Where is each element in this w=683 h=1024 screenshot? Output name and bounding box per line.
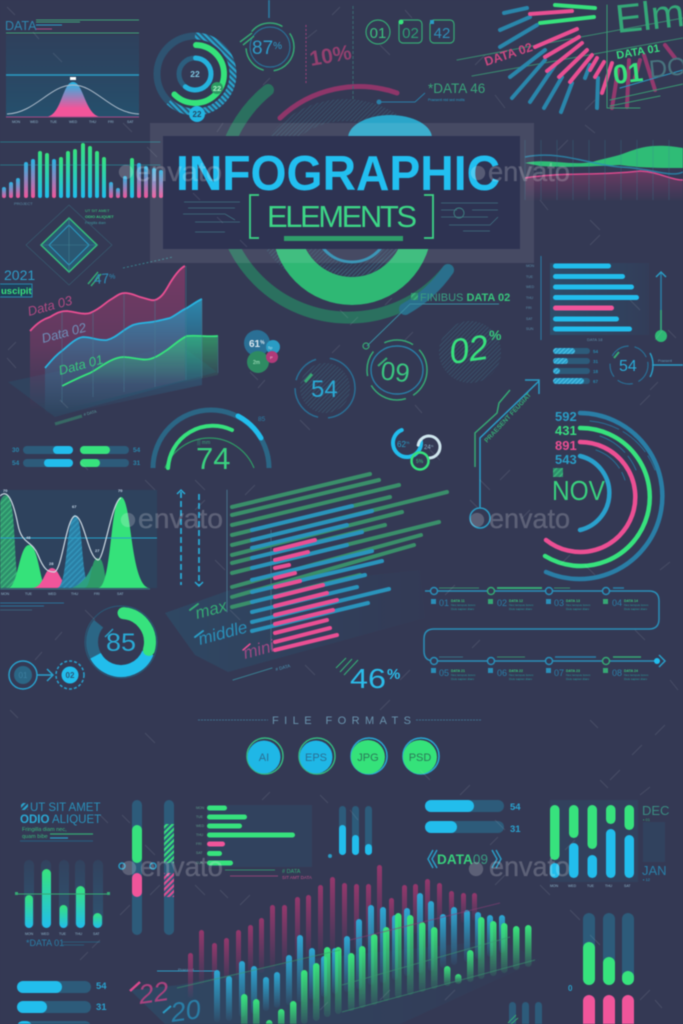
text: 2021 and uscipit [0, 267, 35, 297]
gauge 02%: 02 [447, 328, 491, 372]
chart: multi peak curves: 67 [72, 504, 77, 509]
chart: green cyan stacked columns: MON [550, 884, 559, 888]
heading: FILE FORMATS: FILE FORMATS [272, 715, 411, 727]
timeline labels: DATA 24 [624, 669, 638, 673]
timeline route [424, 588, 665, 681]
slider rows left: 30 [12, 447, 20, 454]
text block: UT SIT AMET [20, 802, 101, 841]
badge PSD: PSD [409, 752, 431, 764]
icon: diamond: UT SIT AMET [85, 208, 110, 213]
donut rings 22: 22 [213, 84, 221, 93]
chart: horizontal bars right: SAT [526, 317, 533, 321]
label max: max [193, 596, 230, 623]
chart: horizontal bars right: MON [526, 264, 535, 268]
gauge 87% [240, 0, 294, 71]
chart: 3D area layers: # DATA [83, 409, 98, 417]
flow 01 to 02: 01 [19, 671, 28, 680]
timeline labels: 03 [554, 598, 564, 608]
bubble cluster 61%: P [270, 355, 273, 360]
gauge 09: 09 [379, 355, 411, 388]
text: 2021 and uscipit: 2021 [4, 267, 35, 283]
gauge 54 [295, 358, 355, 418]
radial chart NOV: 543 [555, 452, 577, 467]
chart: multi peak curves: WED [48, 592, 57, 596]
hatched small bars: 54 [593, 349, 599, 354]
arrow with green ball [655, 272, 667, 342]
subtitle: ELEMENTS [267, 199, 417, 234]
chart: multi peak curves: 70 [118, 488, 123, 493]
chart: tall columns bottom right [568, 913, 634, 1024]
chart: green horizontal bars: SIT AMT DATA [282, 875, 312, 880]
donut rings 22 [157, 36, 233, 122]
axis labels: SAT [127, 120, 134, 124]
badges 01 02 42: 42 [434, 25, 450, 42]
chart: multi peak curves [0, 488, 157, 610]
label *DATA 46: Praesent nisl sed mollis [428, 98, 465, 102]
bubble cluster 61%: 5p [268, 345, 273, 350]
icon: diamond: Fringilla diam [85, 221, 106, 225]
badge AI: AI [259, 752, 269, 764]
timeline labels: Duis sapien diam [509, 677, 533, 681]
label DATA09 [428, 850, 501, 868]
chart: vertical columns: WED [41, 932, 50, 936]
chart: green cyan stacked columns: WED [568, 884, 577, 888]
timeline labels: Duis sapien diam [624, 607, 648, 611]
bubble cluster 61%: 61 [249, 339, 260, 350]
heading: DATA: DATA [5, 19, 37, 33]
chart: green horizontal bars: # DATA [282, 869, 301, 875]
chart: green horizontal bars: THU [196, 833, 204, 837]
bubble cluster 61%: % [260, 340, 265, 346]
label 46% [336, 658, 400, 694]
timeline labels: Nec tempus lorem [566, 673, 591, 677]
chart: green horizontal bars: TUE [196, 815, 204, 819]
chart: max middle mini skew bars [165, 474, 447, 680]
radial chart NOV: 592 [555, 409, 577, 424]
chart: frequency bars: PROJECT [14, 201, 33, 206]
label 22: 22 [136, 976, 171, 1010]
timeline labels: Duis sapien diam [624, 677, 648, 681]
chart: vertical columns: THU [75, 932, 83, 936]
chart: horizontal bars right: DATA 18 [587, 337, 603, 342]
label 46%: 46 [350, 663, 386, 694]
slider rows left: 54 [12, 460, 20, 467]
gauge 09 [367, 340, 427, 400]
chart: vertical columns: *DATA 01 [26, 938, 64, 948]
watermark envato 3: envato [138, 503, 223, 534]
gauge 54: 54 [311, 376, 338, 403]
badges 01 02 42 [353, 6, 454, 100]
gauge 74: ▒ mm [197, 439, 210, 446]
chart: vertical columns [15, 860, 110, 948]
bubble cluster 61% [244, 330, 280, 373]
chart: green horizontal bars: WED [196, 824, 205, 828]
timeline labels [431, 598, 649, 681]
gauge 87%: % [273, 41, 282, 52]
gauge 54 small: Praesent [658, 359, 672, 363]
timeline labels: DATA 14 [624, 599, 638, 603]
hatched small bars: 18 [593, 369, 599, 374]
timeline labels: DATA 11 [451, 599, 465, 603]
text block: UT SIT AMET: quam bibe [22, 834, 48, 840]
layer label: Data 03: Data 03 [26, 292, 75, 319]
axis labels: THU [89, 120, 97, 124]
timeline labels: 01 [439, 598, 449, 608]
radial spoke chart [457, 5, 683, 112]
progress bars bottom left: 54 [96, 981, 107, 992]
timeline labels: Duis sapien diam [451, 677, 475, 681]
chart: max middle mini skew bars: # DATA [275, 663, 291, 672]
layer label: Data 01: Data 01 [57, 352, 105, 378]
chart: cyan progress bars: 31 [510, 824, 521, 835]
timeline labels: 08 [612, 668, 622, 678]
badge AI [247, 738, 283, 774]
timeline labels: 07 [554, 668, 564, 678]
hatched small bars: 67 [593, 379, 599, 384]
chart: multi peak curves: THU [71, 592, 79, 596]
label DATA 02: DATA 02 [483, 40, 534, 69]
chart: green horizontal bars: SAT [196, 851, 203, 855]
axis labels: FRI [108, 120, 114, 124]
timeline labels: Duis sapien diam [509, 607, 533, 611]
chart: cyan progress bars: 54 [510, 802, 521, 813]
donut rings 22: 22 [190, 69, 200, 79]
chart: green horizontal bars: SUN [196, 861, 204, 865]
gauge 54 small [610, 346, 683, 384]
layer label: Data 02: Data 02 [40, 319, 89, 346]
gauge 74: 85 [258, 416, 266, 423]
chart: multi peak curves: 70 [3, 488, 8, 493]
radial chart NOV: 431 [555, 423, 577, 438]
big ring graphics behind title [123, 87, 448, 318]
chart: multi peak curves: SAT [117, 592, 124, 596]
chart: vertical columns: MON [25, 932, 34, 936]
chart: 3D column rows: Praesent [178, 967, 195, 972]
badge EPS: EPS [305, 752, 327, 764]
label JAN: JAN [642, 863, 667, 878]
gauge 02% [439, 321, 502, 383]
row: green columns [241, 913, 532, 1024]
dashed arrows up and down [177, 490, 203, 586]
ring cluster 62%: 24 [424, 445, 431, 451]
format badges [247, 738, 439, 774]
row: blue columns [214, 893, 505, 1022]
label 10% [306, 25, 354, 85]
donut rings 22: 22 [193, 110, 202, 119]
label 47%: % [109, 274, 116, 281]
label 46%: % [387, 666, 400, 683]
badge JPG: JPG [357, 752, 379, 764]
ring cluster 62%: 5% [416, 459, 424, 465]
badges 01 02 42: 01 [370, 25, 386, 42]
text block: Elm DATA 01 01 DOC: 01 [611, 57, 645, 90]
text block: UT SIT AMET: ODIO ALIQUET [20, 814, 101, 826]
timeline labels: Duis sapien diam [566, 607, 590, 611]
ring cluster 62% [391, 427, 442, 470]
label DATA09: DATA09 [437, 852, 488, 867]
hatched small bars: 31 [593, 359, 599, 364]
sliders vertical [119, 800, 174, 935]
watermark envato 4: envato [489, 503, 570, 534]
label middle: middle [196, 618, 249, 649]
chart: green horizontal bars [196, 805, 312, 880]
chart: green horizontal bars: FRI [196, 842, 202, 846]
watermark envato 6: envato [489, 851, 570, 882]
text block: Elm DATA 01 01 DOC [611, 0, 683, 90]
label 10%: 10% [308, 41, 354, 71]
badge PSD [403, 738, 439, 774]
watermark envato 5: envato [140, 851, 223, 882]
gauge 54 small: 54 [619, 358, 637, 375]
ring cluster 62%: % [406, 440, 410, 445]
text block: UT SIT AMET: UT SIT AMET [30, 802, 101, 814]
chart: frequency bars [0, 142, 163, 206]
watermark envato 1: envato [135, 156, 222, 187]
chart: green cyan stacked columns: TUE [587, 884, 595, 888]
timeline labels: DATA 22 [509, 669, 523, 673]
chart: horizontal bars right: THU [526, 296, 534, 300]
timeline labels: Nec tempus lorem [624, 603, 649, 607]
label mini: mini [241, 636, 277, 663]
chart: cyan progress bars [425, 800, 521, 835]
timeline labels: 06 [497, 668, 507, 678]
arrow PRAESENT FEUGIAT: PRAESENT FEUGIAT [483, 392, 533, 444]
timeline labels: 05 [439, 668, 449, 678]
title: INFOGRAPHIC [176, 147, 500, 201]
axis labels: WED [30, 120, 39, 124]
chart: multi peak curves: 48 [26, 535, 31, 540]
icon: diamond: ODIO ALIQUET [85, 214, 114, 219]
chart: mountain area [525, 140, 683, 202]
progress bars bottom left [17, 981, 107, 1024]
slider rows left: 54 [133, 447, 141, 454]
chart: green cyan stacked columns: ▪ 01 [643, 817, 651, 822]
timeline labels: DATA 12 [509, 599, 523, 603]
slider rows left [12, 446, 141, 467]
frame and title box [150, 123, 534, 263]
chart: green horizontal bars: MON [196, 806, 205, 810]
donut 85 [80, 601, 162, 683]
panel: bell curve chart [5, 19, 139, 124]
slider rows left: 31 [133, 460, 141, 467]
chart: small columns bottom [508, 1002, 542, 1024]
axis labels: WED [69, 120, 78, 124]
timeline labels: DATA 21 [451, 669, 465, 673]
gauge 74: 74 [196, 441, 230, 476]
chart: horizontal bars right: WED [526, 285, 535, 289]
axis labels: TUE [50, 120, 58, 124]
timeline labels: 02 [497, 598, 507, 608]
badge EPS [299, 738, 335, 774]
arrow PRAESENT FEUGIAT [470, 380, 539, 528]
chart: green cyan stacked columns: THU [605, 884, 613, 888]
chart: horizontal bars right [526, 256, 649, 342]
flow 01 to 02: 02 [66, 671, 75, 680]
callout FINIBUS DATA 02 [363, 292, 510, 349]
label DEC: DEC [642, 803, 669, 818]
watermark envato 2: envato [488, 156, 570, 187]
chart: 3D area layers [8, 266, 218, 424]
chart: green cyan stacked columns: SAT [624, 884, 631, 888]
chart: horizontal bars right: SUN [526, 327, 534, 331]
chart: multi peak curves: FRI [94, 592, 100, 596]
progress bars bottom left: 31 [96, 1002, 107, 1013]
timeline labels: Nec tempus lorem [566, 603, 591, 607]
timeline labels: Duis sapien diam [566, 677, 590, 681]
gauge 02%: % [489, 327, 502, 343]
callout FINIBUS DATA 02: FINIBUS DATA 02 [420, 292, 510, 304]
ring cluster 62%: % [431, 444, 434, 448]
timeline labels: Duis sapien diam [451, 607, 475, 611]
axis labels: MON [12, 120, 21, 124]
ring cluster 62%: 62 [397, 440, 406, 449]
timeline labels: Nec tempus lorem [451, 603, 476, 607]
timeline labels: 04 [612, 598, 622, 608]
radial chart NOV [545, 409, 662, 579]
chart: horizontal bars right: TUE [526, 275, 534, 279]
icon: diamond [26, 205, 114, 285]
text: 2021 and uscipit: uscipit [1, 286, 32, 297]
chart: multi peak curves: TUE [25, 592, 33, 596]
text block: Elm DATA 01 01 DOC: DATA 01 [615, 43, 661, 62]
gauge 74 [153, 410, 269, 476]
timeline labels: Nec tempus lorem [509, 673, 534, 677]
text block: UT SIT AMET: Fringilla diam nec, [22, 827, 67, 833]
chart: green cyan stacked columns: ▪ 12 [643, 877, 651, 882]
radial chart NOV: NOV [552, 475, 605, 506]
timeline labels: Nec tempus lorem [624, 673, 649, 677]
badge JPG [351, 738, 387, 774]
gauge 87%: 87 [252, 38, 273, 59]
hatched small bars [553, 348, 599, 384]
timeline labels: DATA 13 [566, 599, 580, 603]
bubble cluster 61%: 2m [253, 360, 260, 366]
flow 01 to 02 [9, 661, 84, 689]
chart: vertical columns: TUE [59, 932, 67, 936]
chart: green cyan stacked columns [550, 800, 669, 888]
chart: 3D column rows [130, 865, 540, 1024]
badges 01 02 42: 02 [402, 25, 419, 42]
chart: small cyan columns [328, 806, 372, 858]
chart: multi peak curves: 27 [95, 548, 100, 553]
timeline labels: Nec tempus lorem [451, 673, 476, 677]
brackets and underline [250, 195, 433, 238]
chart: vertical columns: SAT [93, 932, 100, 936]
label 47%: 47 [93, 270, 110, 287]
row: pink columns [188, 865, 477, 998]
chart: tall columns bottom right: 0 [568, 984, 573, 993]
timeline labels: DATA 23 [566, 669, 580, 673]
chart: multi peak curves: MON [1, 592, 10, 596]
donut 85: 85 [106, 629, 136, 657]
label *DATA 46: *DATA 46 [428, 81, 485, 96]
chart: multi peak curves: 28 [49, 561, 54, 566]
radial chart NOV: 891 [555, 438, 577, 453]
label 47% [88, 270, 116, 287]
timeline labels: Nec tempus lorem [509, 603, 534, 607]
chart: horizontal bars right: FRI [526, 306, 532, 310]
